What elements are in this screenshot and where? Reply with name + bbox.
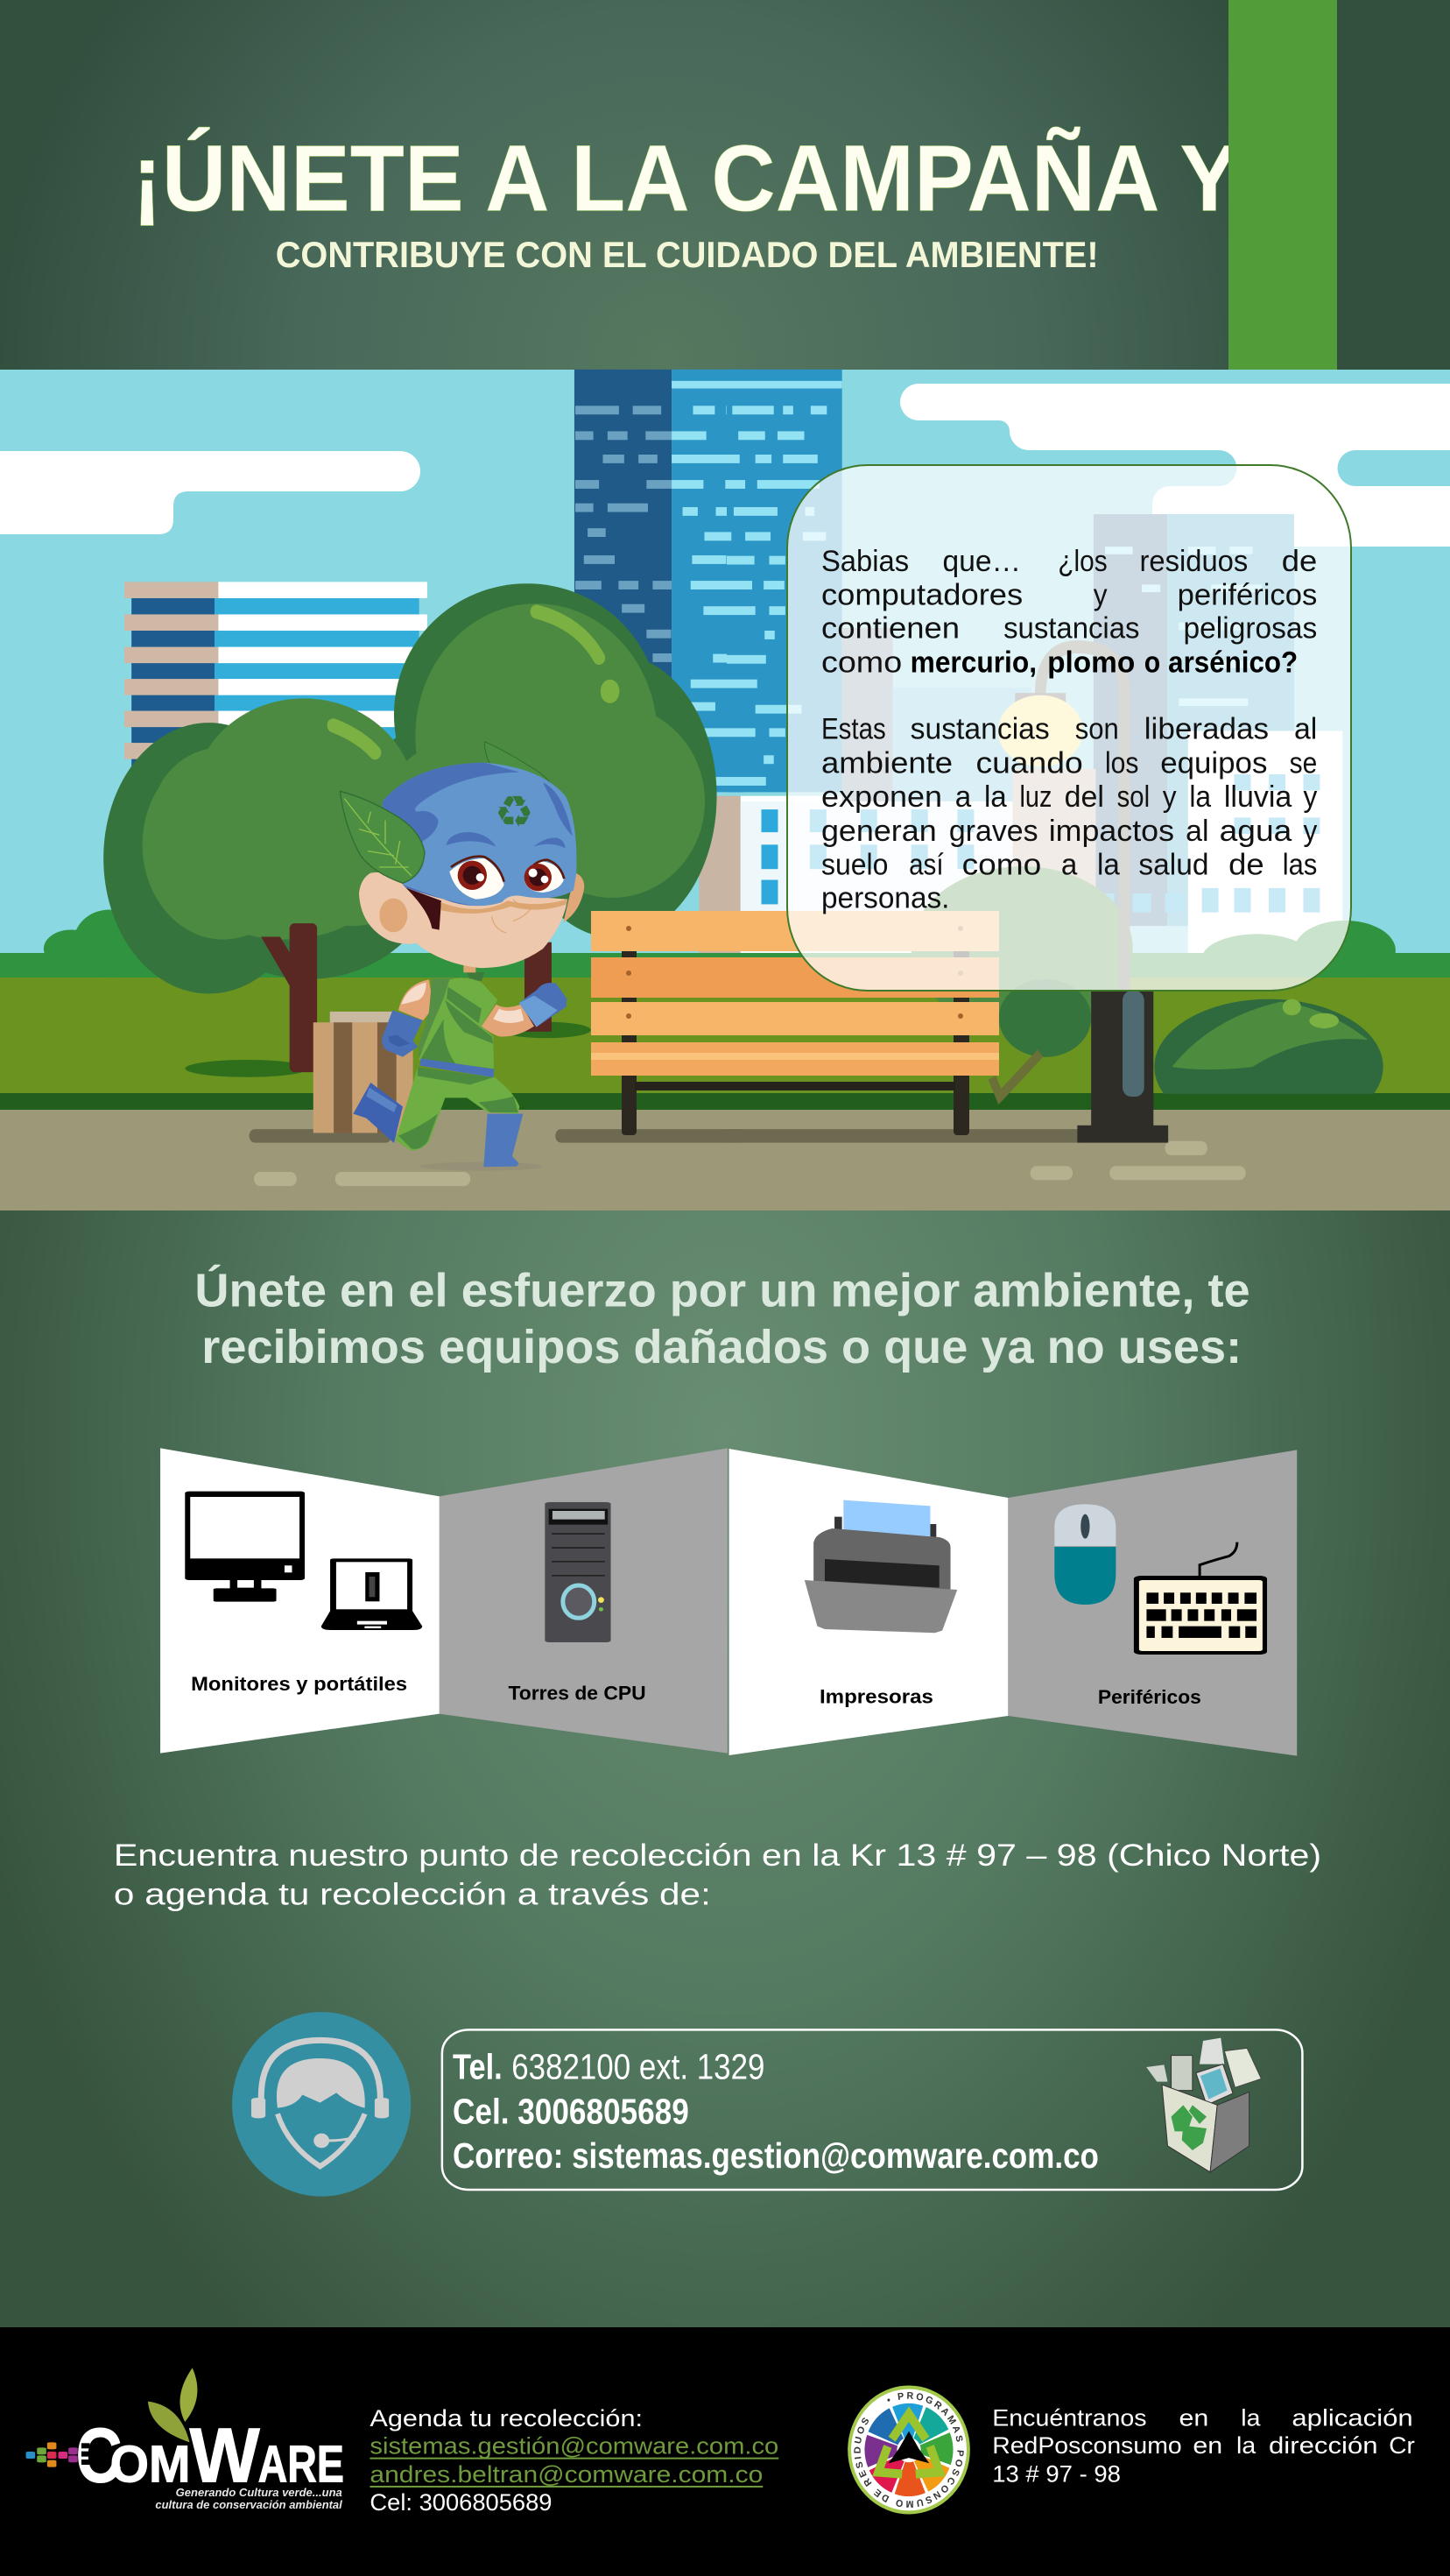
logo tagline (155, 2486, 342, 2511)
illustration panel: park scene (0, 370, 1450, 1211)
contact text (453, 2047, 1099, 2176)
text block: schedule pickup: Agenda tu recolección: (370, 2405, 643, 2431)
footer content (26, 2368, 1415, 2516)
contact text: Tel. (453, 2047, 503, 2086)
card: peripherals (1008, 1450, 1297, 1756)
callout text: cuando (975, 745, 1083, 780)
card: CPU towers (440, 1448, 728, 1754)
callout text: equipos (1160, 745, 1267, 780)
icon: mouse (1054, 1504, 1116, 1605)
callout text: sol (1117, 780, 1150, 814)
text block: schedule pickup: Cel: 3006805689 (370, 2489, 552, 2516)
callout text: de (1282, 544, 1317, 578)
card: monitors and laptops (160, 1448, 440, 1754)
callout text: personas. (821, 881, 949, 914)
callout text: graves (949, 814, 1038, 848)
callout text: los (1105, 745, 1138, 780)
callout text: son (1075, 712, 1119, 745)
text block: find us in the app: 13 # 97 - 98 (992, 2460, 1121, 2487)
callout text: agua (1220, 814, 1292, 848)
text block: find us in the app: en (1193, 2432, 1222, 2459)
folded panel: accepted equipment: Monitores y portátiles (191, 1673, 407, 1695)
icon: customer support headset (232, 2012, 411, 2197)
callout text: peligrosas (1184, 610, 1317, 645)
callout text: salud (1138, 847, 1209, 881)
callout text: la (1097, 847, 1120, 881)
background buildings (124, 370, 1342, 958)
callout text: luz (1020, 780, 1052, 814)
far hedge and lawn (0, 910, 1450, 1211)
card: CPU towers: Torres de CPU (508, 1683, 646, 1704)
right buildings (699, 370, 1342, 958)
callout text (821, 544, 1318, 914)
collection panel background (0, 1210, 1450, 2328)
heading: join the effort (194, 1265, 1250, 1373)
callout text: de (1228, 847, 1264, 881)
card: printers: Impresoras (820, 1686, 933, 1707)
icon: recycling bin with devices (1146, 2038, 1261, 2172)
green vertical bar (1228, 0, 1337, 371)
callout text: Estas (821, 712, 886, 745)
footer panel (0, 2327, 1450, 2576)
contact text: 6382100 ext. 1329 (511, 2047, 764, 2086)
character: body (353, 972, 567, 1171)
text block: find us in the app: Encuéntranos (992, 2404, 1147, 2431)
footer content: Generando Cultura verde...una (176, 2486, 342, 2499)
trash bin (313, 1012, 413, 1133)
callout text: y (1303, 814, 1318, 848)
callout text: y (1303, 780, 1318, 814)
callout text: o (1144, 645, 1160, 679)
lamp post and bush (998, 647, 1383, 1143)
callout text: lluvia (1224, 780, 1292, 814)
bench (591, 911, 999, 1135)
callout text: plomo (1047, 645, 1135, 679)
callout text: al (1294, 712, 1317, 745)
callout text: del (1065, 780, 1104, 814)
text block: collection point (114, 1838, 1321, 1911)
folded panel: accepted equipment (160, 1448, 1297, 1756)
lane markings and shadows (250, 1129, 1246, 1186)
character: head (340, 742, 584, 972)
left striped building (124, 370, 744, 792)
sky (0, 370, 1450, 965)
contact block (232, 2012, 1302, 2197)
callout text: impactos (1049, 814, 1174, 848)
contact details box (442, 2029, 1302, 2190)
icon: leaf on helmet (340, 791, 425, 883)
contact text: Cel. 3006805689 (453, 2092, 689, 2131)
clouds (0, 384, 1450, 547)
text block: find us in the app: la (1241, 2404, 1261, 2431)
callout text: arsénico? (1168, 645, 1298, 679)
callout text: como (821, 645, 902, 679)
footer content: ARE (258, 2435, 344, 2493)
callout text: contienen (821, 610, 960, 645)
callout text: ¿los (1058, 544, 1108, 578)
icon: laptop (321, 1558, 422, 1630)
text block: find us in the app (992, 2404, 1415, 2487)
text block: schedule pickup (370, 2405, 778, 2516)
text block: collection point: o agenda tu recolección a través de: (114, 1877, 711, 1911)
text block: find us in the app: la (1236, 2432, 1256, 2459)
icon: recycle mark on helmet: ♻ (495, 787, 534, 837)
callout text: generan (821, 814, 937, 848)
callout text: la (1189, 780, 1211, 814)
callout text: sustancias (911, 712, 1050, 745)
callout text: liberadas (1144, 712, 1269, 745)
callout text: y (1163, 780, 1178, 814)
callout text: exponen (821, 780, 942, 814)
callout text: Sabias (821, 544, 909, 578)
callout text: a (955, 780, 971, 814)
icon: printer (805, 1500, 957, 1633)
icon: monitor (185, 1492, 305, 1602)
logo: ComWare: OM (110, 2435, 191, 2493)
card: printers (729, 1449, 1008, 1755)
callout text: computadores (821, 577, 1023, 611)
callout text: periféricos (1178, 577, 1317, 611)
callout text: sustancias (1003, 610, 1139, 645)
icon: keyboard (1134, 1542, 1267, 1655)
callout text: suelo (821, 847, 888, 881)
callout text: que… (943, 544, 1021, 578)
footer content: cultura de conservación ambiental (155, 2498, 342, 2511)
header panel (0, 0, 1450, 371)
callout text: residuos (1139, 544, 1248, 578)
card: peripherals: Periféricos (1098, 1686, 1201, 1708)
callout panel: did you know (787, 465, 1351, 991)
callout text: mercurio, (911, 645, 1037, 679)
logo: ComWare: W (190, 2411, 260, 2498)
logo: ComWare: C (76, 2411, 122, 2498)
icon: CPU tower (545, 1502, 611, 1642)
callout text: las (1283, 847, 1317, 881)
callout text: la (984, 780, 1007, 814)
callout text: así (909, 847, 944, 881)
callout text: y (1094, 577, 1109, 611)
trees (103, 583, 717, 1077)
callout text: al (1186, 814, 1209, 848)
small tree behind bench (912, 866, 1133, 1097)
text block: find us in the app: en (1179, 2404, 1208, 2431)
footer content: andres.beltran@comware.com.co (370, 2461, 763, 2488)
logo: post-consumption programs seal: • PROGRAMAS POSCONSUMO DE RESIDUOS (854, 2392, 964, 2508)
callout text: se (1290, 745, 1317, 780)
logo: ComWare (26, 2368, 344, 2511)
callout text: como (962, 847, 1041, 881)
callout text: ambiente (821, 745, 953, 780)
callout text: a (1061, 847, 1077, 881)
